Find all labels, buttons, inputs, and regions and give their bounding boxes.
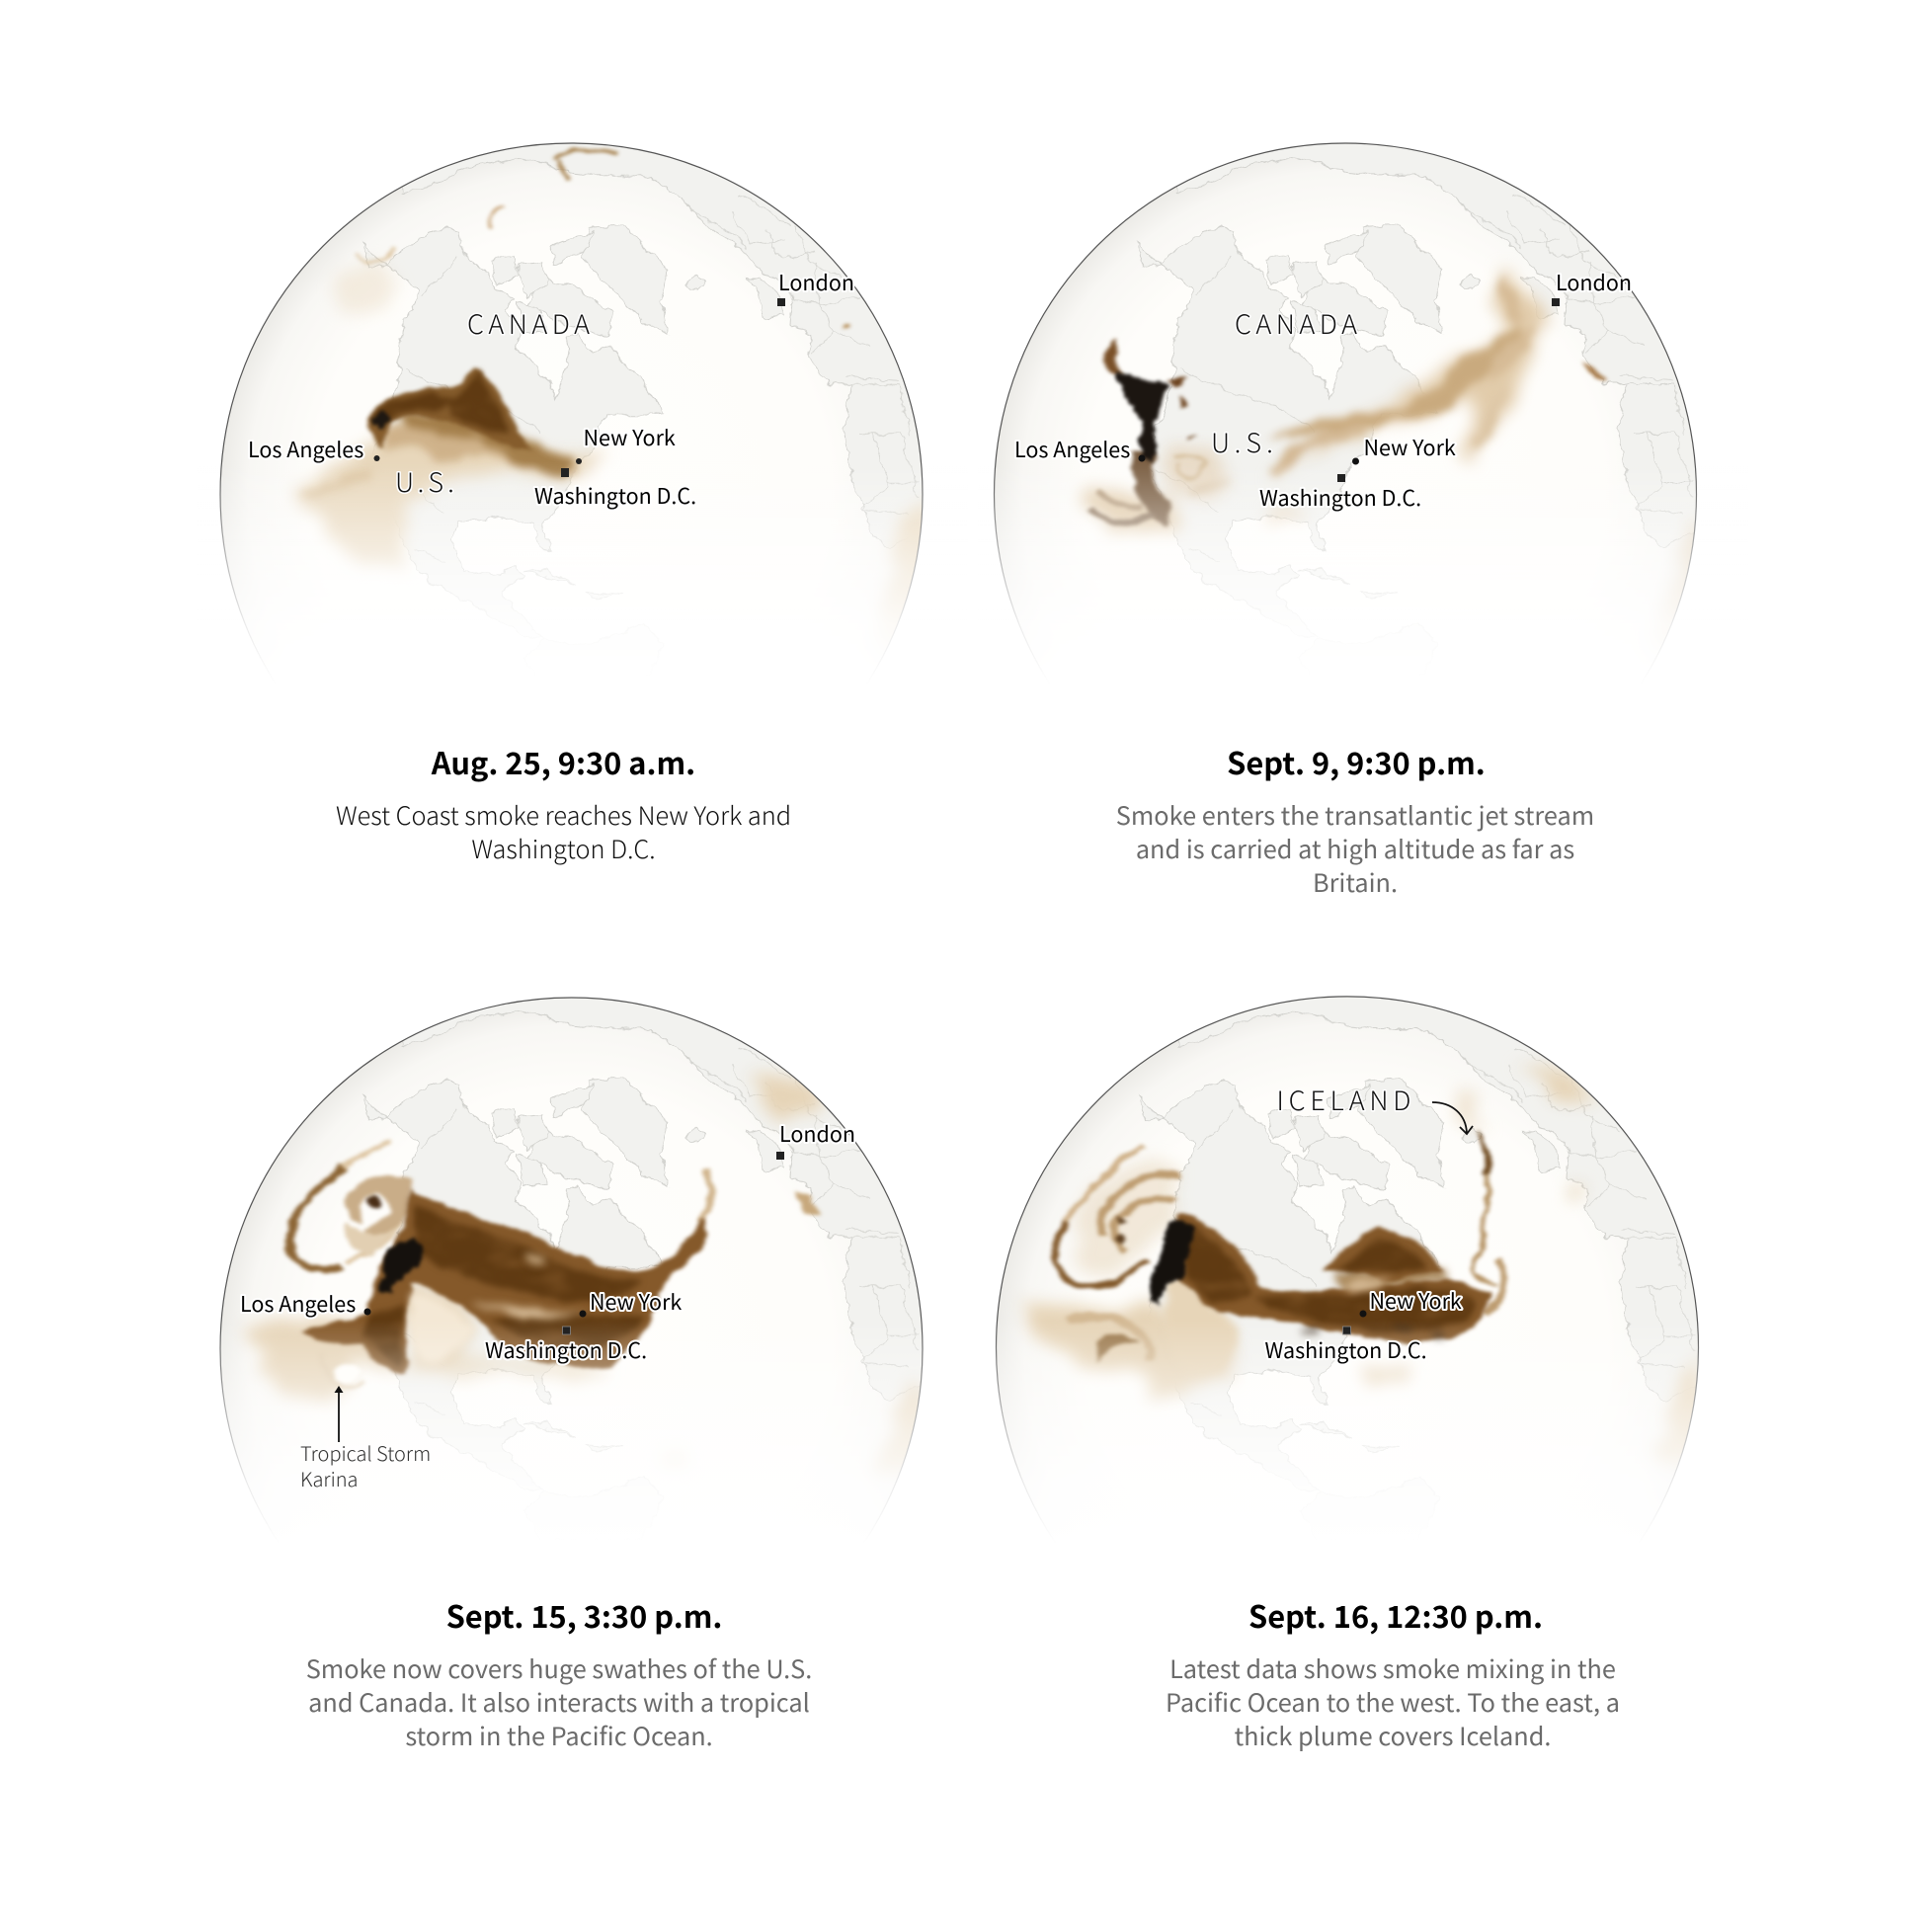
smoke plume Sept. 15 xyxy=(247,1079,928,1476)
map labels: Sept. 15 xyxy=(240,1118,855,1492)
caption: Sept. 15 xyxy=(306,1592,812,1753)
arrow: to Iceland xyxy=(1432,1102,1473,1134)
label: U.S.: U.S. xyxy=(395,461,458,500)
smoke plume Sept. 16 xyxy=(1012,1064,1709,1460)
heading: Sept. 9, 9:30 p.m. xyxy=(1227,739,1486,783)
description: Smoke enters the transatlantic jet stream xyxy=(1116,797,1594,833)
label: New York: New York xyxy=(1363,432,1456,462)
panel: globe Sept. 9 xyxy=(994,142,1697,660)
smoke plume Sept. 9 xyxy=(1085,273,1709,650)
label: Washington D.C.: Washington D.C. xyxy=(1264,1334,1427,1365)
panel: globe Sept. 16 xyxy=(996,996,1699,1519)
label: CANADA: CANADA xyxy=(1235,303,1361,342)
infographic canvas xyxy=(219,142,1699,1751)
label: U.S.: U.S. xyxy=(1211,422,1278,460)
map labels: Aug. 25 xyxy=(248,267,854,511)
smoke plume Aug. 25 xyxy=(294,150,933,658)
label: Los Angeles: Los Angeles xyxy=(248,434,363,464)
heading: Sept. 15, 3:30 p.m. xyxy=(446,1592,722,1637)
map labels: Sept. 9 xyxy=(1014,267,1632,513)
label: Washington D.C.: Washington D.C. xyxy=(1259,482,1421,513)
label: New York: New York xyxy=(590,1286,682,1317)
description: storm in the Pacific Ocean. xyxy=(405,1718,713,1753)
arrow: Tropical Storm Karina xyxy=(334,1386,344,1442)
description: Smoke now covers huge swathes of the U.S. xyxy=(306,1650,812,1686)
label: London: London xyxy=(779,1118,855,1149)
panel: globe Aug. 25 xyxy=(198,111,988,863)
description: Latest data shows smoke mixing in the xyxy=(1169,1650,1616,1686)
label: Tropical Storm Karina: Karina xyxy=(300,1464,358,1492)
description: Washington D.C. xyxy=(471,831,656,866)
description: Britain. xyxy=(1313,864,1398,900)
label: London: London xyxy=(1556,267,1632,297)
label: Washington D.C.: Washington D.C. xyxy=(485,1334,647,1365)
label: Washington D.C.: Washington D.C. xyxy=(534,480,696,511)
description: Pacific Ocean to the west. To the east, a xyxy=(1166,1684,1620,1720)
description: and Canada. It also interacts with a tropical xyxy=(308,1684,810,1720)
heading: Sept. 16, 12:30 p.m. xyxy=(1248,1592,1543,1637)
label: New York: New York xyxy=(583,422,676,452)
label: Tropical Storm Karina: Tropical Storm xyxy=(300,1438,431,1467)
description: thick plume covers Iceland. xyxy=(1235,1718,1551,1753)
caption: Sept. 16 xyxy=(1166,1592,1620,1753)
heading: Aug. 25, 9:30 a.m. xyxy=(431,739,695,783)
label: New York: New York xyxy=(1369,1285,1462,1316)
label: Los Angeles: Los Angeles xyxy=(240,1288,356,1319)
label: London: London xyxy=(778,267,854,297)
label: Los Angeles: Los Angeles xyxy=(1014,434,1130,464)
panel: globe Sept. 15 xyxy=(219,997,924,1519)
label: CANADA: CANADA xyxy=(467,303,595,342)
map labels: Sept. 16 xyxy=(1264,1080,1473,1365)
caption: Sept. 9 xyxy=(1116,739,1594,900)
label: ICELAND: ICELAND xyxy=(1276,1080,1415,1118)
description: and is carried at high altitude as far as xyxy=(1136,831,1574,866)
label: New York xyxy=(576,422,676,464)
description: West Coast smoke reaches New York and xyxy=(336,797,791,833)
caption: Aug. 25 xyxy=(336,739,791,866)
